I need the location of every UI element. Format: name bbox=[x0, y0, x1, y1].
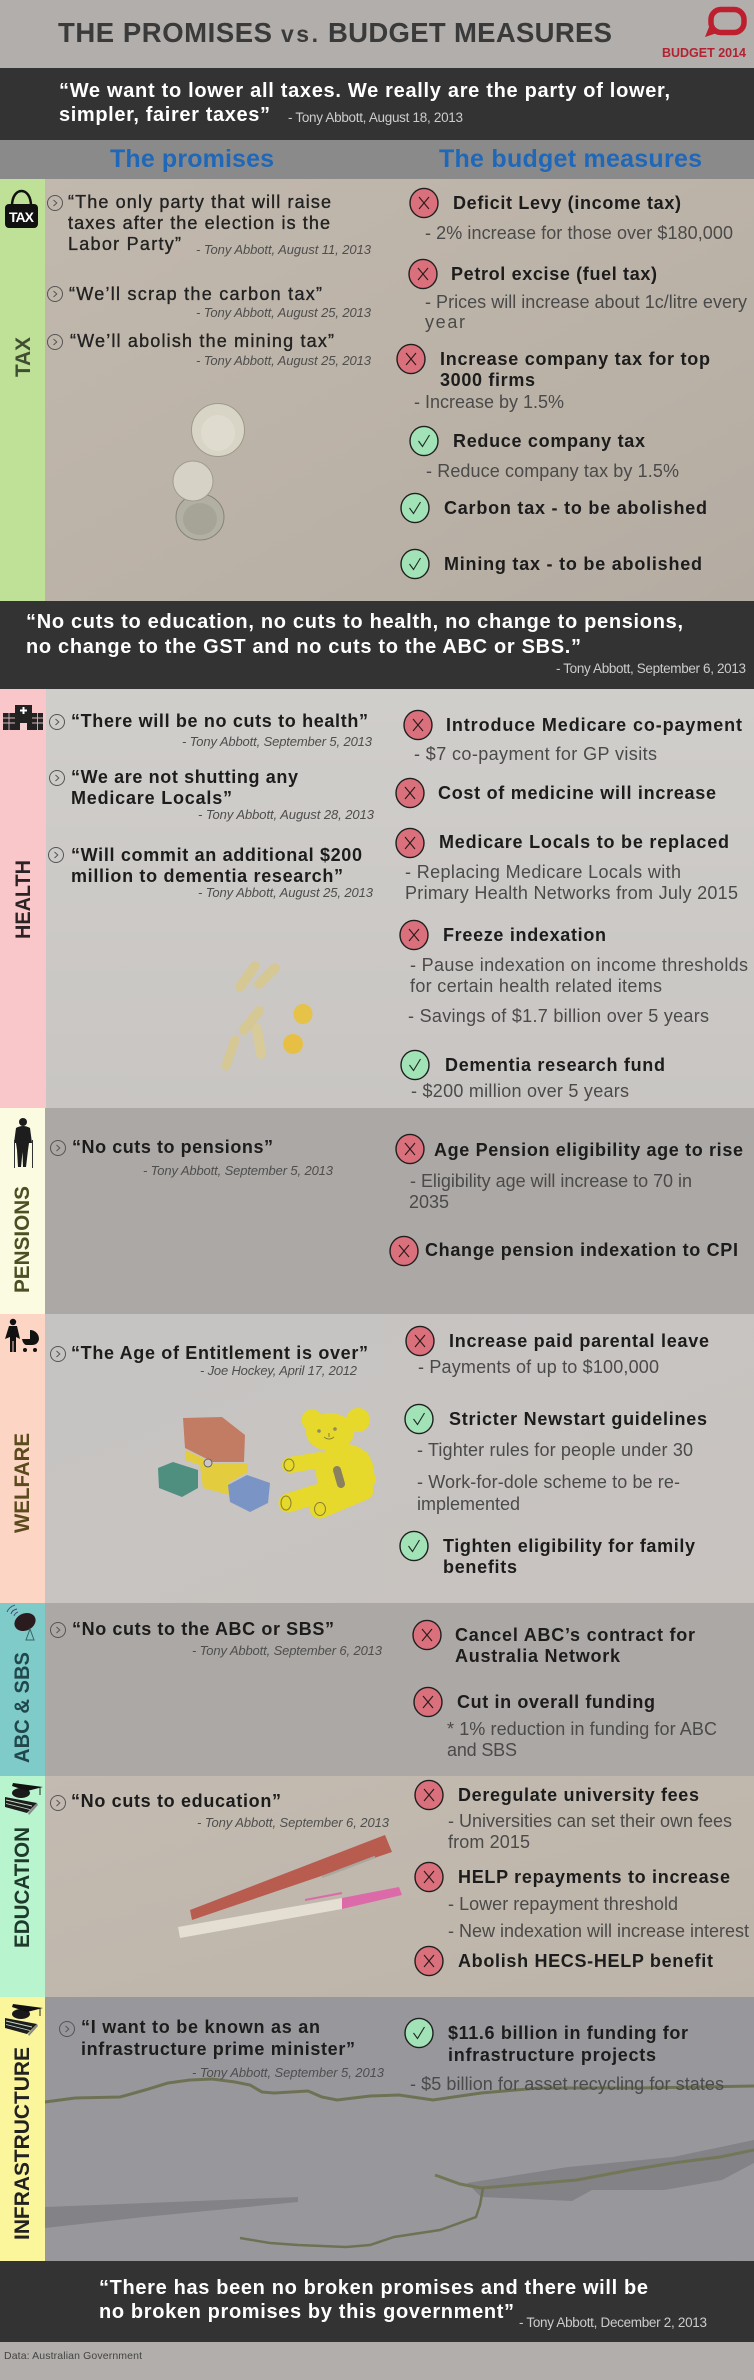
icon: books and mortarboard bbox=[5, 1783, 43, 1815]
budget measures: health: - $200 million over 5 years bbox=[411, 1081, 629, 1101]
budget measures: health: - Savings of $1.7 billion over 5 years bbox=[408, 1006, 709, 1026]
quote band: lower taxes: “We want to lower all taxes. We really are the party of lower, bbox=[59, 80, 670, 102]
promise quotes: tax: - Tony Abbott, August 25, 2013 bbox=[196, 305, 372, 320]
budget measures: pensions: Age Pension eligibility age to rise bbox=[434, 1140, 743, 1160]
budget measures: education: Deregulate university fees bbox=[458, 1785, 699, 1805]
title: BUDGET MEASURES bbox=[328, 17, 612, 48]
column headers bbox=[0, 140, 754, 179]
icon: hospital bbox=[3, 705, 43, 730]
footer source note: Data: Australian Government bbox=[4, 2350, 142, 2362]
budget measures: health: - Replacing Medicare Locals with bbox=[405, 862, 681, 882]
image: pens bbox=[178, 1835, 402, 1938]
budget measures: welfare: Tighten eligibility for family bbox=[443, 1536, 695, 1556]
budget measures: health: Primary Health Networks from July 2015 bbox=[405, 883, 738, 903]
budget measures: education: - Lower repayment threshold bbox=[448, 1894, 678, 1914]
promise quotes: health: “There will be no cuts to health” bbox=[71, 711, 368, 731]
budget measures: health bbox=[396, 710, 748, 1101]
budget measures: education: - New indexation will increase interest bbox=[448, 1921, 749, 1941]
budget measures: pensions bbox=[390, 1134, 743, 1266]
icon: elderly person with crutches bbox=[14, 1118, 32, 1168]
quote band: no broken promises: - Tony Abbott, December 2, 2013 bbox=[519, 2315, 707, 2330]
promise quote: education: - Tony Abbott, September 6, 2013 bbox=[197, 1815, 390, 1830]
budget measures: tax: year bbox=[425, 312, 465, 332]
budget measures: education bbox=[415, 1780, 749, 1976]
budget measures: infrastructure: $11.6 billion in funding for bbox=[448, 2023, 688, 2043]
panel: welfare bbox=[0, 1314, 754, 1603]
quote band: no broken promises: “There has been no broken promises and there will be bbox=[99, 2277, 648, 2299]
promise quote: ABC and SBS bbox=[50, 1619, 383, 1658]
budget measures: ABC and SBS: Cancel ABC’s contract for bbox=[455, 1625, 695, 1645]
budget measures: pensions: - Eligibility age will increase to 70 in bbox=[410, 1171, 692, 1191]
budget measures: tax bbox=[397, 188, 747, 579]
label: tax: TAX bbox=[12, 337, 35, 377]
label: infrastructure: INFRASTRUCTURE bbox=[11, 2047, 34, 2240]
budget measures: health: Dementia research fund bbox=[445, 1055, 665, 1075]
budget measures: tax: Deficit Levy (income tax) bbox=[453, 193, 681, 213]
label: pensions: PENSIONS bbox=[11, 1186, 34, 1293]
budget measures: health: for certain health related items bbox=[410, 976, 662, 996]
panel: health bbox=[0, 689, 754, 1108]
quote band: no cuts: no change to the GST and no cuts to the ABC or SBS.” bbox=[26, 636, 581, 658]
icon: books and mortarboard bbox=[5, 2004, 43, 2036]
promise quote: ABC and SBS: - Tony Abbott, September 6, 2013 bbox=[192, 1643, 383, 1658]
budget measures: tax: - Increase by 1.5% bbox=[414, 392, 564, 412]
logo: Budget 2014: BUDGET 2014 bbox=[662, 46, 746, 60]
image: coins bbox=[173, 404, 244, 540]
quote band: no broken promises bbox=[0, 2261, 754, 2342]
promise quote: welfare bbox=[50, 1343, 368, 1378]
panel: ABC and SBS bbox=[0, 1603, 754, 1776]
budget measures: ABC and SBS bbox=[413, 1620, 717, 1760]
budget measures: health: - $7 co-payment for GP visits bbox=[414, 744, 657, 764]
budget measures: tax: - 2% increase for those over $180,000 bbox=[425, 223, 733, 243]
icon: tax bag: TAX bbox=[9, 209, 35, 225]
budget measures: ABC and SBS: Australia Network bbox=[455, 1646, 621, 1666]
promise quotes: health: - Tony Abbott, August 25, 2013 bbox=[198, 885, 374, 900]
icon: tax bag bbox=[5, 191, 38, 228]
quote band: no cuts: - Tony Abbott, September 6, 2013 bbox=[556, 661, 746, 676]
quote band: lower taxes: simpler, fairer taxes” bbox=[59, 104, 270, 126]
promise quote: pensions: “No cuts to pensions” bbox=[72, 1137, 273, 1157]
quote band: lower taxes: - Tony Abbott, August 18, 2013 bbox=[288, 110, 463, 125]
title: vs. bbox=[281, 21, 318, 47]
image: toy blocks and teddy bear bbox=[158, 1408, 374, 1516]
budget measures: education: from 2015 bbox=[448, 1832, 530, 1852]
promise quote: infrastructure: “I want to be known as an bbox=[81, 2017, 320, 2037]
title bbox=[58, 17, 612, 48]
promise quote: infrastructure: - Tony Abbott, September 5, 2013 bbox=[192, 2065, 385, 2080]
promise quotes: health bbox=[48, 711, 375, 900]
budget measures: tax: Petrol excise (fuel tax) bbox=[451, 264, 657, 284]
label: ABC and SBS: ABC & SBS bbox=[11, 1652, 34, 1763]
budget measures: health: Introduce Medicare co-payment bbox=[446, 715, 742, 735]
promise quotes: tax: Labor Party” bbox=[68, 234, 181, 254]
promise quotes: tax: “We’ll abolish the mining tax” bbox=[70, 331, 334, 351]
promise quotes: health: - Tony Abbott, September 5, 2013 bbox=[182, 734, 373, 749]
panel: tax bbox=[0, 179, 754, 601]
promise quotes: health: “We are not shutting any bbox=[71, 767, 298, 787]
budget measures: infrastructure: - $5 billion for asset recycling for states bbox=[410, 2074, 724, 2094]
promise quote: ABC and SBS: “No cuts to the ABC or SBS” bbox=[72, 1619, 334, 1639]
icon: satellite dish bbox=[7, 1605, 39, 1640]
budget measures: infrastructure bbox=[405, 2018, 724, 2094]
column headers: The promises bbox=[110, 145, 274, 173]
budget measures: welfare: - Work-for-dole scheme to be re- bbox=[417, 1472, 680, 1492]
budget measures: infrastructure: infrastructure projects bbox=[448, 2045, 656, 2065]
budget measures: health: Cost of medicine will increase bbox=[438, 783, 716, 803]
promise quotes: tax: - Tony Abbott, August 25, 2013 bbox=[196, 353, 372, 368]
quote band: no cuts bbox=[0, 601, 754, 689]
budget measures: health: - Pause indexation on income thresholds bbox=[410, 955, 748, 975]
quote band: no cuts: “No cuts to education, no cuts to health, no change to pensions, bbox=[26, 611, 683, 633]
budget measures: tax: Reduce company tax bbox=[453, 431, 645, 451]
budget measures: pensions: Change pension indexation to CPI bbox=[425, 1240, 738, 1260]
panel: infrastructure bbox=[0, 1997, 754, 2261]
icon: parent with pram bbox=[5, 1319, 39, 1352]
image: cracked road bbox=[45, 2079, 754, 2247]
promise quotes: tax: - Tony Abbott, August 11, 2013 bbox=[196, 242, 372, 257]
promise quotes: tax: taxes after the election is the bbox=[68, 213, 330, 233]
budget measures: tax: 3000 firms bbox=[440, 370, 535, 390]
promise quote: pensions bbox=[50, 1137, 334, 1178]
label: education: EDUCATION bbox=[11, 1827, 34, 1948]
budget measures: tax: - Reduce company tax by 1.5% bbox=[426, 461, 679, 481]
label: welfare: WELFARE bbox=[11, 1433, 34, 1533]
budget measures: welfare: - Payments of up to $100,000 bbox=[418, 1357, 659, 1377]
budget measures: tax: Increase company tax for top bbox=[440, 349, 710, 369]
promise quote: welfare: “The Age of Entitlement is over” bbox=[71, 1343, 368, 1363]
quote band: no broken promises: no broken promises by this government” bbox=[99, 2301, 514, 2323]
image: pills bbox=[226, 966, 312, 1066]
budget measures: ABC and SBS: * 1% reduction in funding for ABC bbox=[447, 1719, 717, 1739]
budget measures: welfare: benefits bbox=[443, 1557, 517, 1577]
budget measures: pensions: 2035 bbox=[409, 1192, 449, 1212]
label: health: HEALTH bbox=[12, 860, 35, 939]
promise quote: infrastructure bbox=[60, 2017, 385, 2080]
column headers: The budget measures bbox=[439, 145, 702, 173]
title: THE PROMISES bbox=[58, 17, 272, 48]
logo: Budget 2014 bbox=[662, 10, 746, 60]
promise quotes: tax bbox=[48, 192, 372, 368]
budget measures: tax: Mining tax - to be abolished bbox=[444, 554, 702, 574]
panel: pensions bbox=[0, 1108, 754, 1314]
panel: education bbox=[0, 1776, 754, 1997]
promise quote: pensions: - Tony Abbott, September 5, 2013 bbox=[143, 1163, 334, 1178]
budget measures: health: Medicare Locals to be replaced bbox=[439, 832, 729, 852]
promise quotes: tax: “The only party that will raise bbox=[68, 192, 331, 212]
promise quotes: health: Medicare Locals” bbox=[71, 788, 232, 808]
budget measures: welfare: Increase paid parental leave bbox=[449, 1331, 709, 1351]
promise quote: education: “No cuts to education” bbox=[71, 1791, 281, 1811]
budget measures: welfare: implemented bbox=[417, 1494, 520, 1514]
budget measures: tax: - Prices will increase about 1c/litre every bbox=[425, 292, 747, 312]
promise quote: education bbox=[50, 1791, 390, 1830]
budget measures: education: HELP repayments to increase bbox=[458, 1867, 730, 1887]
budget measures: welfare: Stricter Newstart guidelines bbox=[449, 1409, 707, 1429]
budget measures: education: Abolish HECS-HELP benefit bbox=[458, 1951, 713, 1971]
budget measures: welfare bbox=[400, 1326, 709, 1577]
promise quote: infrastructure: infrastructure prime minister” bbox=[81, 2039, 355, 2059]
budget measures: ABC and SBS: and SBS bbox=[447, 1740, 517, 1760]
promise quotes: health: “Will commit an additional $200 bbox=[71, 845, 362, 865]
quote band: lower taxes bbox=[0, 68, 754, 140]
promise quote: welfare: - Joe Hockey, April 17, 2012 bbox=[200, 1363, 358, 1378]
promise quotes: health: - Tony Abbott, August 28, 2013 bbox=[198, 807, 375, 822]
budget measures: health: Freeze indexation bbox=[443, 925, 606, 945]
budget measures: tax: Carbon tax - to be abolished bbox=[444, 498, 707, 518]
budget measures: education: - Universities can set their own fees bbox=[448, 1811, 732, 1831]
budget measures: ABC and SBS: Cut in overall funding bbox=[457, 1692, 655, 1712]
budget measures: welfare: - Tighter rules for people under 30 bbox=[417, 1440, 693, 1460]
promise quotes: health: million to dementia research” bbox=[71, 866, 343, 886]
promise quotes: tax: “We’ll scrap the carbon tax” bbox=[69, 284, 322, 304]
